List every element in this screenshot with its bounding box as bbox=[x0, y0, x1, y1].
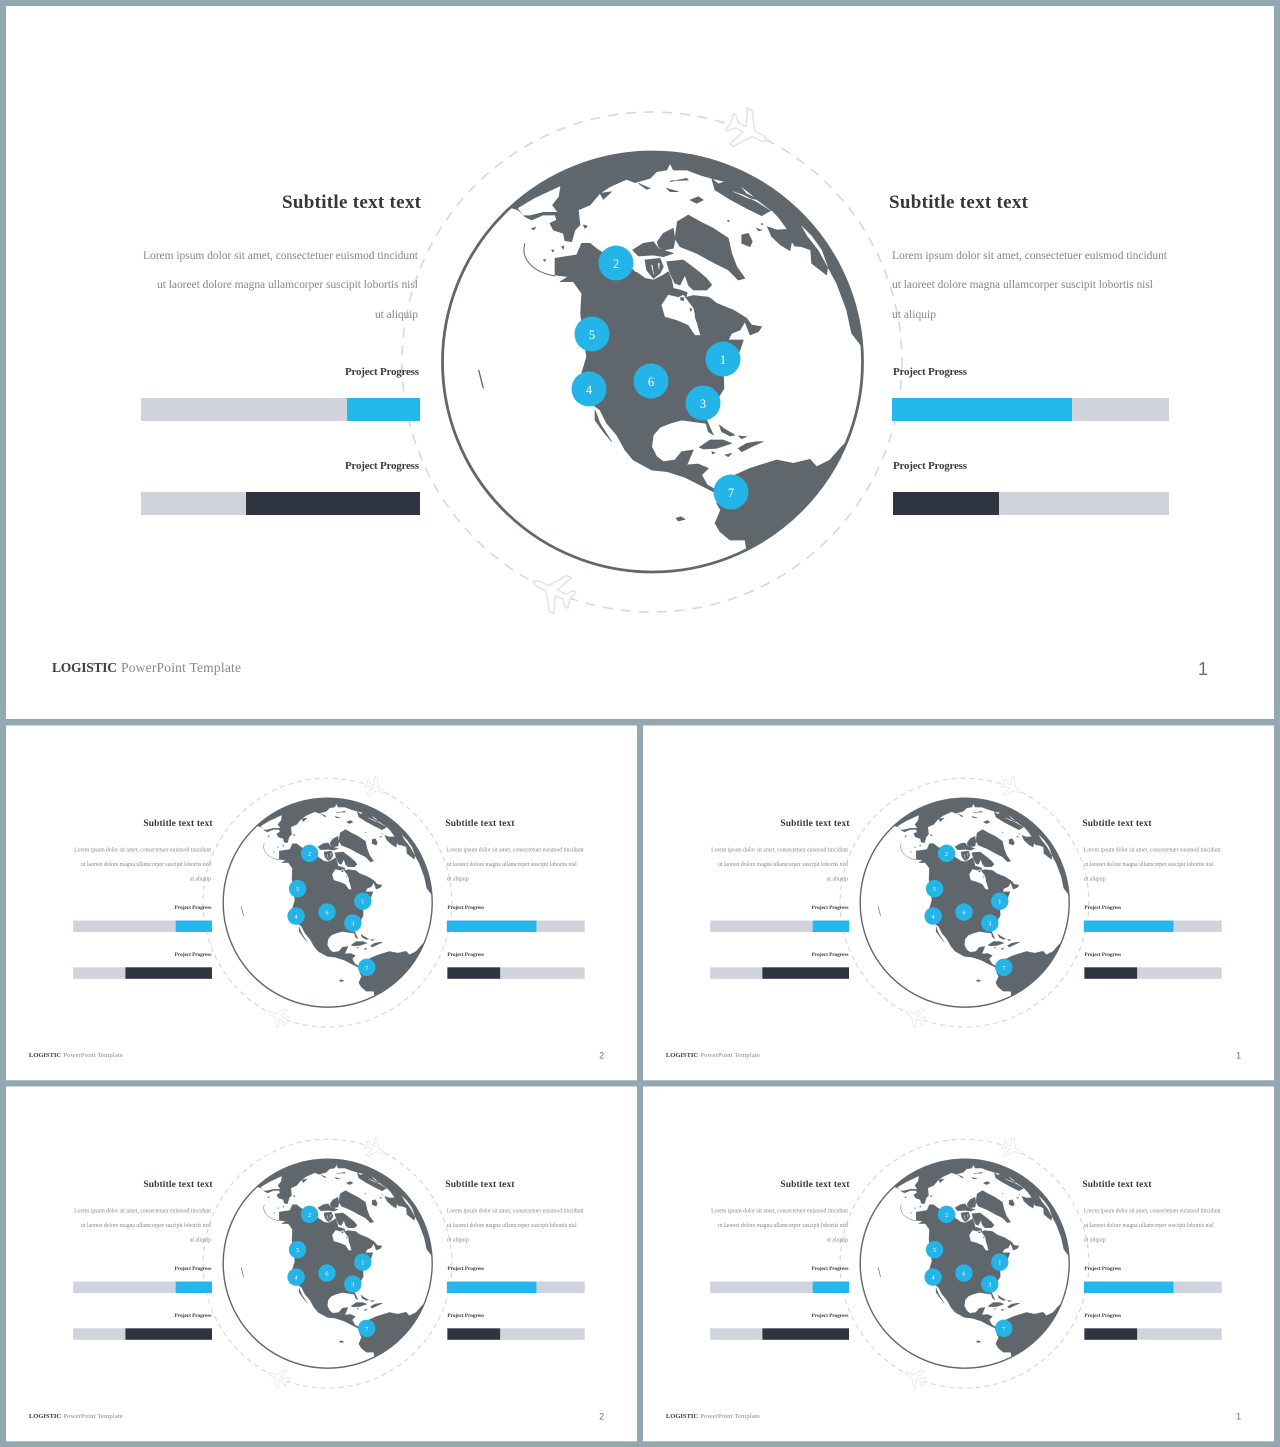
footer: LOGISTIC bbox=[29, 1413, 61, 1420]
icon: plane bottom bbox=[264, 1364, 292, 1391]
map pins: 4 bbox=[932, 1275, 936, 1282]
right body text: ut aliquip bbox=[1084, 1238, 1106, 1244]
footer: PowerPoint Template bbox=[700, 1413, 760, 1420]
left body text: Lorem ipsum dolor sit amet, consectetuer euismod tincidunt bbox=[711, 847, 848, 853]
left body text: ut aliquip bbox=[827, 877, 848, 883]
icon: plane top bbox=[361, 774, 390, 802]
map pins: 5 bbox=[296, 1247, 299, 1254]
left subtitle: Subtitle text text bbox=[282, 192, 422, 213]
icon: plane top bbox=[998, 774, 1027, 802]
right progress 2: Project Progress bbox=[1084, 1313, 1121, 1319]
footer: PowerPoint Template bbox=[121, 660, 241, 675]
right progress 1 bbox=[447, 1266, 585, 1293]
globe bbox=[860, 789, 1076, 1008]
right body text bbox=[1084, 1208, 1221, 1244]
map pins: 2 bbox=[613, 257, 619, 271]
map pins: 7 bbox=[365, 965, 368, 972]
left progress 1 bbox=[73, 1266, 212, 1293]
footer bbox=[666, 1052, 760, 1059]
left body text bbox=[74, 847, 211, 883]
left body text: Lorem ipsum dolor sit amet, consectetuer euismod tincidunt bbox=[74, 1208, 211, 1214]
map pins bbox=[924, 1206, 1012, 1337]
map pins bbox=[924, 845, 1012, 976]
right subtitle: Subtitle text text bbox=[445, 819, 515, 829]
right progress 1 bbox=[447, 905, 585, 932]
right progress 2 bbox=[447, 1313, 585, 1340]
map pins bbox=[287, 1206, 375, 1337]
icon: plane top bbox=[361, 1135, 390, 1163]
left body text: ut laoreet dolore magna ullamcorper suscipit lobortis nisl bbox=[718, 1223, 848, 1229]
right progress 1 bbox=[1084, 1266, 1222, 1293]
left body text: ut laoreet dolore magna ullamcorper suscipit lobortis nisl bbox=[81, 1223, 211, 1229]
right progress 2: Project Progress bbox=[893, 460, 968, 472]
right subtitle: Subtitle text text bbox=[889, 192, 1029, 213]
map pins: 2 bbox=[308, 1212, 311, 1219]
left body text: ut laoreet dolore magna ullamcorper suscipit lobortis nisl bbox=[81, 862, 211, 868]
right subtitle: Subtitle text text bbox=[445, 1180, 515, 1190]
icon: plane top bbox=[998, 1135, 1027, 1163]
left progress 1 bbox=[141, 366, 420, 421]
icon: plane bottom bbox=[524, 563, 580, 618]
left body text bbox=[711, 1208, 848, 1244]
map pins: 5 bbox=[933, 1247, 936, 1254]
right progress 2: Project Progress bbox=[447, 952, 484, 958]
globe bbox=[860, 1150, 1076, 1369]
map pins: 6 bbox=[648, 375, 654, 389]
right body text: ut aliquip bbox=[1084, 877, 1106, 883]
left progress 2 bbox=[710, 1313, 849, 1340]
left body text bbox=[74, 1208, 211, 1244]
map pins: 3 bbox=[988, 921, 991, 928]
map pins: 1 bbox=[720, 353, 726, 367]
map pins: 3 bbox=[988, 1282, 991, 1289]
slide 3: small top right bbox=[643, 726, 1274, 1080]
right body text: ut aliquip bbox=[892, 309, 936, 321]
left progress 1 bbox=[710, 1266, 849, 1293]
footer bbox=[29, 1413, 123, 1420]
left body text: Lorem ipsum dolor sit amet, consectetuer euismod tincidunt bbox=[74, 847, 211, 853]
dashed flight ring bbox=[840, 1139, 1089, 1388]
right progress 2: Project Progress bbox=[1084, 952, 1121, 958]
map pins: 5 bbox=[296, 886, 299, 893]
map pins: 3 bbox=[700, 397, 706, 411]
icon: plane bottom bbox=[264, 1003, 292, 1030]
slide 5: small bottom right bbox=[643, 1086, 1274, 1441]
right body text: Lorem ipsum dolor sit amet, consectetuer euismod tincidunt bbox=[892, 250, 1168, 262]
right body text: ut laoreet dolore magna ullamcorper suscipit lobortis nisl bbox=[892, 279, 1153, 291]
left progress 1 bbox=[73, 905, 212, 932]
left body text: Lorem ipsum dolor sit amet, consectetuer euismod tincidunt bbox=[711, 1208, 848, 1214]
right body text: Lorem ipsum dolor sit amet, consectetuer euismod tincidunt bbox=[1084, 1208, 1221, 1214]
left subtitle: Subtitle text text bbox=[143, 1180, 213, 1190]
left body text: ut aliquip bbox=[190, 1238, 211, 1244]
map pins: 4 bbox=[586, 383, 593, 397]
globe bbox=[223, 789, 439, 1008]
right progress 1: Project Progress bbox=[447, 1266, 484, 1272]
left progress 2: Project Progress bbox=[345, 460, 420, 472]
map pins: 6 bbox=[962, 910, 966, 917]
map pins: 1 bbox=[998, 1260, 1001, 1267]
right body text: Lorem ipsum dolor sit amet, consectetuer euismod tincidunt bbox=[447, 1208, 584, 1214]
icon: plane bottom bbox=[901, 1364, 929, 1391]
left progress 2 bbox=[710, 952, 849, 979]
map pins: 3 bbox=[351, 1282, 354, 1289]
right body text bbox=[447, 847, 584, 883]
right subtitle: Subtitle text text bbox=[1082, 1180, 1152, 1190]
map pins bbox=[287, 845, 375, 976]
left body text bbox=[143, 250, 419, 321]
left body text: ut aliquip bbox=[375, 309, 418, 321]
icon: plane top bbox=[720, 104, 777, 159]
dashed flight ring bbox=[203, 778, 452, 1027]
dashed flight ring bbox=[203, 1139, 452, 1388]
map pins: 3 bbox=[351, 921, 354, 928]
right body text bbox=[892, 250, 1168, 321]
left subtitle: Subtitle text text bbox=[780, 819, 850, 829]
left subtitle: Subtitle text text bbox=[780, 1180, 850, 1190]
right body text: Lorem ipsum dolor sit amet, consectetuer euismod tincidunt bbox=[1084, 847, 1221, 853]
left progress 1: Project Progress bbox=[175, 1266, 212, 1272]
left body text: ut aliquip bbox=[190, 877, 211, 883]
footer bbox=[666, 1413, 760, 1420]
left progress 1: Project Progress bbox=[345, 366, 420, 378]
left progress 1: Project Progress bbox=[175, 905, 212, 911]
footer: LOGISTIC bbox=[666, 1413, 698, 1420]
map pins: 7 bbox=[728, 486, 734, 500]
left body text: Lorem ipsum dolor sit amet, consectetuer euismod tincidunt bbox=[143, 250, 419, 262]
right progress 1: Project Progress bbox=[1084, 1266, 1121, 1272]
map pins: 7 bbox=[1002, 1326, 1005, 1333]
footer: LOGISTIC bbox=[52, 660, 117, 675]
map pins: 1 bbox=[361, 899, 364, 906]
right progress 2 bbox=[447, 952, 585, 979]
left progress 1: Project Progress bbox=[812, 905, 849, 911]
right progress 1: Project Progress bbox=[1084, 905, 1121, 911]
left subtitle: Subtitle text text bbox=[143, 819, 213, 829]
left progress 2: Project Progress bbox=[175, 952, 212, 958]
right progress 2: Project Progress bbox=[447, 1313, 484, 1319]
dashed flight ring bbox=[840, 778, 1089, 1027]
right body text: ut laoreet dolore magna ullamcorper suscipit lobortis nisl bbox=[1084, 862, 1214, 868]
map pins: 1 bbox=[361, 1260, 364, 1267]
left body text: ut aliquip bbox=[827, 1238, 848, 1244]
map pins: 5 bbox=[933, 886, 936, 893]
footer: PowerPoint Template bbox=[700, 1052, 760, 1059]
map pins: 4 bbox=[932, 914, 936, 921]
footer: LOGISTIC bbox=[666, 1052, 698, 1059]
footer: LOGISTIC bbox=[29, 1052, 61, 1059]
page number: 2 bbox=[599, 1411, 604, 1421]
footer: PowerPoint Template bbox=[63, 1413, 123, 1420]
slide 2: small top left bbox=[6, 726, 637, 1080]
map pins: 2 bbox=[945, 1212, 948, 1219]
right progress 1 bbox=[1084, 905, 1222, 932]
globe bbox=[223, 1150, 439, 1369]
page number: 1 bbox=[1236, 1411, 1241, 1421]
map pins: 6 bbox=[325, 910, 329, 917]
left progress 2: Project Progress bbox=[812, 1313, 849, 1319]
left progress 2: Project Progress bbox=[175, 1313, 212, 1319]
footer: PowerPoint Template bbox=[63, 1052, 123, 1059]
right body text: ut laoreet dolore magna ullamcorper suscipit lobortis nisl bbox=[447, 862, 577, 868]
map pins bbox=[572, 246, 748, 510]
right body text bbox=[1084, 847, 1221, 883]
right progress 2 bbox=[1084, 952, 1222, 979]
right body text: ut laoreet dolore magna ullamcorper suscipit lobortis nisl bbox=[1084, 1223, 1214, 1229]
left body text: ut laoreet dolore magna ullamcorper suscipit lobortis nisl bbox=[718, 862, 848, 868]
page number: 2 bbox=[599, 1050, 604, 1060]
right progress 2 bbox=[893, 460, 1169, 515]
left progress 2 bbox=[73, 952, 212, 979]
left body text bbox=[711, 847, 848, 883]
map pins: 1 bbox=[998, 899, 1001, 906]
map pins: 2 bbox=[308, 851, 311, 858]
right progress 1: Project Progress bbox=[447, 905, 484, 911]
left progress 2 bbox=[141, 460, 420, 515]
map pins: 4 bbox=[295, 1275, 299, 1282]
page number: 1 bbox=[1198, 659, 1208, 679]
left progress 2 bbox=[73, 1313, 212, 1340]
map pins: 7 bbox=[1002, 965, 1005, 972]
map pins: 2 bbox=[945, 851, 948, 858]
dashed flight ring bbox=[402, 112, 902, 612]
right body text: Lorem ipsum dolor sit amet, consectetuer euismod tincidunt bbox=[447, 847, 584, 853]
footer bbox=[52, 660, 241, 675]
globe bbox=[442, 133, 877, 573]
right body text bbox=[447, 1208, 584, 1244]
left progress 2: Project Progress bbox=[812, 952, 849, 958]
map pins: 7 bbox=[365, 1326, 368, 1333]
map pins: 6 bbox=[962, 1271, 966, 1278]
right progress 2 bbox=[1084, 1313, 1222, 1340]
slide 1: large bbox=[6, 6, 1274, 719]
right subtitle: Subtitle text text bbox=[1082, 819, 1152, 829]
map pins: 6 bbox=[325, 1271, 329, 1278]
right body text: ut aliquip bbox=[447, 1238, 469, 1244]
left progress 1: Project Progress bbox=[812, 1266, 849, 1272]
map pins: 4 bbox=[295, 914, 299, 921]
slide 4: small bottom left bbox=[6, 1086, 637, 1441]
right body text: ut laoreet dolore magna ullamcorper suscipit lobortis nisl bbox=[447, 1223, 577, 1229]
right progress 1: Project Progress bbox=[893, 366, 968, 378]
map pins: 5 bbox=[589, 328, 595, 342]
right body text: ut aliquip bbox=[447, 877, 469, 883]
left body text: ut laoreet dolore magna ullamcorper suscipit lobortis nisl bbox=[157, 279, 418, 291]
icon: plane bottom bbox=[901, 1003, 929, 1030]
page number: 1 bbox=[1236, 1050, 1241, 1060]
left progress 1 bbox=[710, 905, 849, 932]
right progress 1 bbox=[892, 366, 1169, 421]
footer bbox=[29, 1052, 123, 1059]
